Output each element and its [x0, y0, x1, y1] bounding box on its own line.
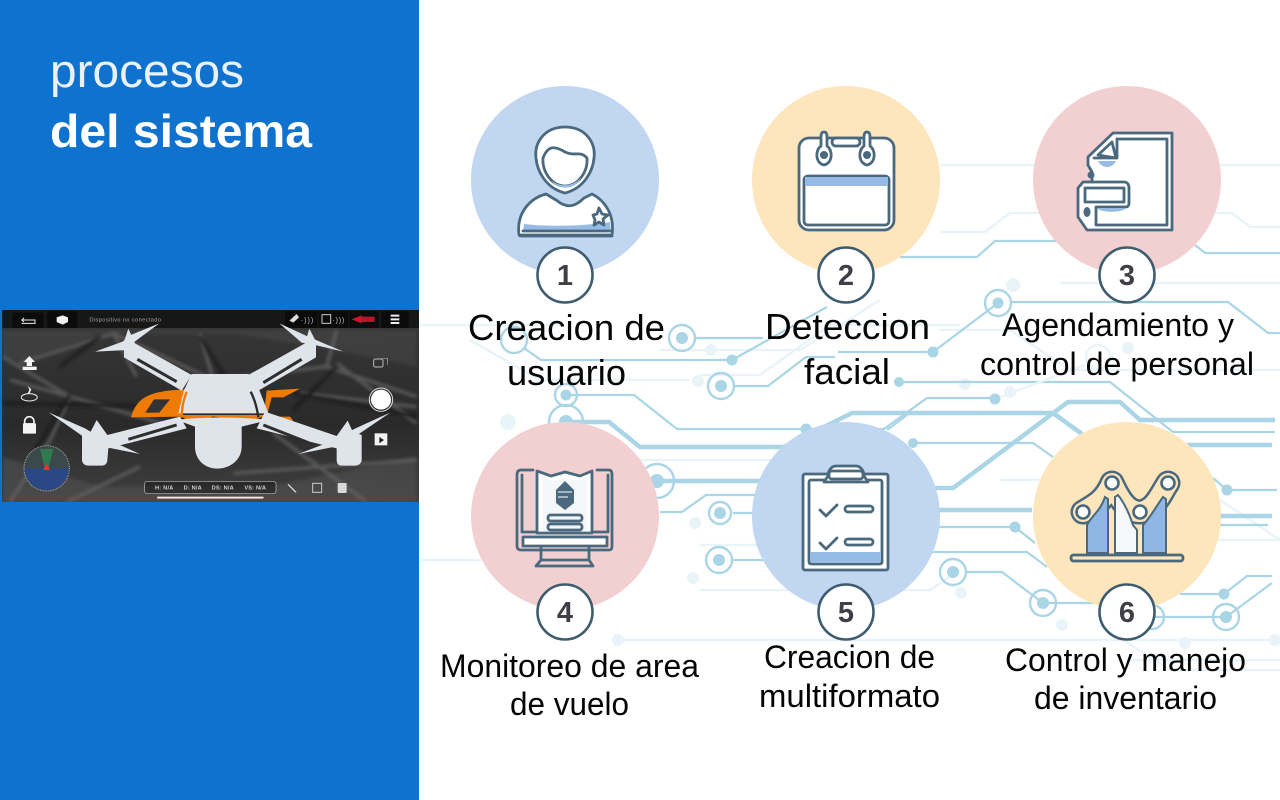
label 4: [440, 648, 699, 722]
step 1: creacion de usuario: [471, 86, 659, 274]
circle 2: [752, 86, 940, 274]
step 6: inventario: [1033, 422, 1221, 610]
drone app screenshot: DS: N/A: [212, 486, 234, 492]
heading: del sistema: [50, 105, 312, 157]
left panel: [0, 0, 419, 800]
label 1: [468, 307, 665, 393]
status bar: [145, 481, 276, 494]
number badge 3: 3: [1119, 260, 1135, 292]
circle 1: [471, 86, 659, 274]
label 5: Creacion de: [764, 639, 935, 675]
label 4: Monitoreo de area: [440, 648, 699, 684]
number badge 5: [818, 584, 874, 640]
label 1: usuario: [507, 352, 626, 393]
number badge 6: [1100, 584, 1154, 640]
label 2: [765, 306, 930, 392]
label 3: control de personal: [980, 346, 1254, 382]
icon: user: [519, 127, 612, 236]
number badge 4: [538, 584, 592, 640]
number badge 4: 4: [557, 597, 573, 629]
circle 4: [471, 422, 659, 610]
number badge 1: [538, 248, 592, 302]
number badge 1: 1: [557, 260, 573, 292]
number badge 3: [1100, 248, 1154, 302]
heading: procesos: [50, 44, 244, 97]
label 2: facial: [804, 351, 890, 392]
icon: document: [1078, 133, 1172, 230]
icon: monitor: [517, 470, 612, 566]
circle 5: [752, 422, 940, 610]
drone silhouette: [49, 323, 391, 469]
label 5: [759, 639, 940, 714]
drone app screenshot: ·))): [301, 316, 313, 325]
number badge 6: 6: [1119, 597, 1135, 629]
heading: [50, 44, 312, 157]
drone app screenshot: ·))): [332, 316, 344, 325]
drone app screenshot: [2, 310, 419, 502]
drone app screenshot: Dispositivo no conectado: [89, 317, 161, 323]
icon: calendar: [799, 132, 894, 230]
step 4: monitoreo: [471, 422, 659, 610]
label 1: Creacion de: [468, 307, 665, 348]
left controls: [23, 356, 37, 370]
horizon gauge: [24, 446, 69, 491]
drone app screenshot: D: N/A: [184, 486, 202, 492]
orange logo: [131, 389, 187, 417]
top bar: [2, 310, 419, 328]
label 3: Agendamiento y: [1002, 307, 1234, 343]
step 5: multiformato: [752, 422, 940, 610]
right controls: [369, 388, 393, 411]
number badge 5: 5: [838, 597, 854, 629]
background: circuit board pattern: [420, 165, 1280, 670]
label 6: Control y manejo: [1005, 642, 1246, 678]
label 5: multiformato: [759, 678, 940, 714]
step 2: deteccion facial: [752, 86, 940, 274]
label 6: de inventario: [1034, 680, 1217, 716]
icon: clipboard checklist: [803, 466, 888, 570]
label 4: de vuelo: [510, 686, 629, 722]
label 6: [1005, 642, 1246, 716]
circle 6: [1033, 422, 1221, 610]
drone app screenshot: VS: N/A: [244, 486, 266, 492]
label 2: Deteccion: [765, 306, 930, 347]
icon: chart: [1071, 476, 1183, 561]
drone app screenshot: H: N/A: [155, 486, 173, 492]
number badge 2: [818, 248, 874, 302]
step 3: agendamiento: [1033, 86, 1221, 274]
number badge 2: 2: [838, 260, 854, 292]
circle 3: [1033, 86, 1221, 274]
label 3: [980, 307, 1254, 382]
